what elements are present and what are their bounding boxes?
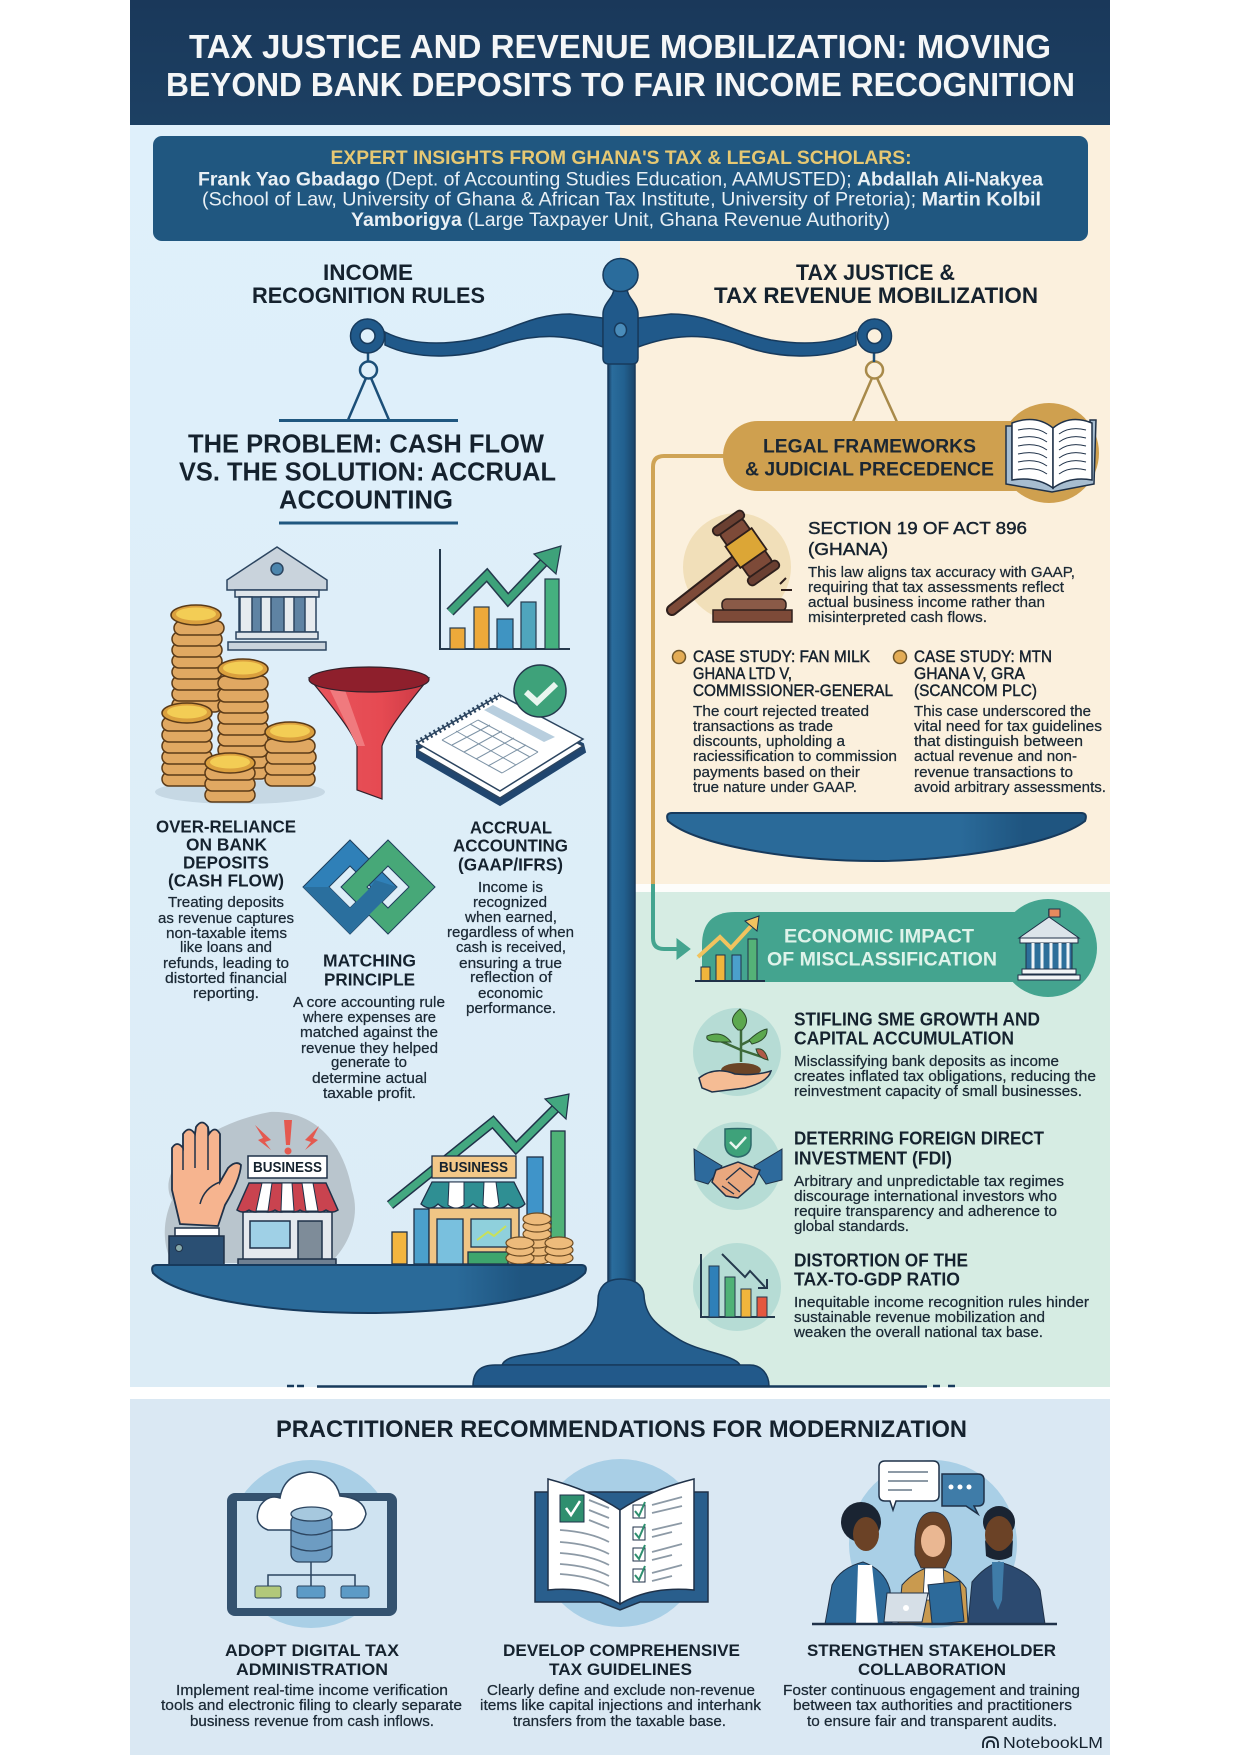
case study: MTN: This case underscored the <box>914 703 1091 720</box>
text: over-reliance on bank deposits: distorted financial <box>165 970 287 987</box>
text: section 19: This law aligns tax accuracy with GAAP, <box>808 564 1075 581</box>
beam rings <box>350 319 892 353</box>
bullet <box>894 650 906 664</box>
case study: MTN <box>894 648 1106 796</box>
case study: Fan Milk: The court rejected treated <box>693 703 869 720</box>
page backgrounds <box>130 125 1110 1755</box>
text: over-reliance on bank deposits: ON BANK <box>186 834 267 854</box>
header banner <box>130 0 1110 125</box>
heading: tax justice: TAX REVENUE MOBILIZATION <box>714 283 1038 308</box>
case study: MTN: avoid arbitrary assessments. <box>914 779 1106 796</box>
heading: income recognition rules: INCOME <box>323 260 413 285</box>
icon: digital tax tablet <box>227 1460 397 1628</box>
text: develop guidelines: TAX GUIDELINES <box>549 1660 692 1679</box>
expert names <box>198 170 1043 231</box>
economic heading text <box>767 926 997 970</box>
text <box>794 1128 1064 1235</box>
heading: tax justice: TAX JUSTICE & <box>796 260 955 285</box>
text: develop guidelines: Clearly define and exclude non-revenue <box>487 1682 755 1699</box>
text: over-reliance on bank deposits: OVER-RELIANCE <box>156 816 296 836</box>
bullet <box>672 650 686 664</box>
text: Inequitable income recognition rules hinder <box>794 1294 1089 1311</box>
expert names: (School of Law, University of Ghana & African Tax Institute, University of Pretoria); Martin Kolbil <box>202 190 1041 210</box>
heading: income recognition rules: RECOGNITION RULES <box>252 283 485 308</box>
coin stack left <box>162 703 212 786</box>
person middle <box>898 1512 968 1625</box>
icon: growth chart <box>440 546 570 649</box>
text: matching principle: where expenses are <box>302 1009 436 1026</box>
expert names: Frank Yao Gbadago (Dept. of Accounting Studies Education, AAMUSTED); Abdallah Ali-Nakyea <box>198 170 1043 190</box>
text: strengthen collaboration: between tax authorities and practitioners <box>793 1697 1072 1714</box>
panel: practitioner recommendations <box>161 1416 1103 1752</box>
icon: thriving business <box>390 1094 573 1264</box>
text: matching principle: matched against the <box>300 1024 438 1041</box>
text: over-reliance on bank deposits: non-taxable items <box>166 925 287 942</box>
left hanger <box>348 353 389 420</box>
coin stack back <box>171 605 224 712</box>
icon: ledger with check <box>417 665 585 805</box>
text: DISTORTION OF THE <box>794 1250 968 1270</box>
text: section 19: actual business income rather than <box>808 594 1045 611</box>
text: over-reliance on bank deposits: DEPOSITS <box>183 852 269 872</box>
text: section 19: SECTION 19 OF ACT 896 <box>808 518 1027 538</box>
text: accrual accounting: cash is received, <box>456 939 566 956</box>
item: tax-to-GDP distortion <box>693 1243 1089 1341</box>
item: deterring FDI <box>693 1122 1064 1235</box>
item: stifling SME growth <box>693 1008 1096 1100</box>
icon: handshake with shield <box>693 1122 782 1210</box>
text <box>794 1010 1096 1100</box>
text: adopt digital tax: tools and electronic filing to clearly separate <box>161 1697 462 1714</box>
person right <box>968 1506 1045 1624</box>
icon: stakeholder collaboration <box>812 1460 1057 1628</box>
legal heading text: & JUDICIAL PRECEDENCE <box>745 460 994 480</box>
heading: problem vs solution: VS. THE SOLUTION: ACCRUAL <box>179 456 556 486</box>
case study: Fan Milk: payments based on their <box>693 764 860 781</box>
pillar <box>608 350 635 1295</box>
icon: stopped business <box>165 1112 355 1265</box>
case study: Fan Milk: true nature under GAAP. <box>693 779 857 796</box>
icon: thriving business: BUSINESS <box>439 1160 508 1176</box>
icon: declining chart <box>693 1243 781 1331</box>
case study: Fan Milk: COMMISSIONER-GENERAL <box>693 682 893 700</box>
text: section 19 <box>808 518 1075 626</box>
text: over-reliance on bank deposits: like loans and <box>180 939 272 956</box>
text: matching principle: PRINCIPLE <box>324 970 415 990</box>
icon: bank building <box>227 547 327 650</box>
text: over-reliance on bank deposits: as revenue captures <box>158 910 294 927</box>
text: reinvestment capacity of small businesses. <box>794 1083 1082 1100</box>
case study: Fan Milk: discounts, upholding a <box>693 733 846 750</box>
small coin stacks <box>506 1213 573 1264</box>
text: over-reliance on bank deposits: (CASH FLOW) <box>168 870 284 890</box>
case study: MTN: actual revenue and non- <box>914 748 1077 765</box>
title: BEYOND BANK DEPOSITS TO FAIR INCOME RECOGNITION <box>166 66 1075 103</box>
text: matching principle: MATCHING <box>323 950 416 970</box>
icon: coin stacks <box>155 605 325 804</box>
banner: economic impact <box>695 899 1097 997</box>
icon: gavel <box>672 509 792 622</box>
text: accrual accounting: regardless of when <box>447 924 574 941</box>
text: TAX-TO-GDP RATIO <box>794 1270 960 1290</box>
text: over-reliance on bank deposits <box>156 816 296 1002</box>
expert heading: EXPERT INSIGHTS FROM GHANA'S TAX & LEGAL SCHOLARS: <box>330 147 912 169</box>
icon: government building <box>1018 909 1080 980</box>
text: accrual accounting: ensuring a true <box>459 955 562 972</box>
text: INVESTMENT (FDI) <box>794 1148 952 1168</box>
text: creates inflated tax obligations, reducing the <box>794 1068 1096 1085</box>
legal heading text: LEGAL FRAMEWORKS <box>763 436 976 458</box>
text: strengthen collaboration: STRENGTHEN STAKEHOLDER <box>807 1641 1056 1660</box>
ground line <box>812 1623 1057 1625</box>
case study: Fan Milk: transactions as trade <box>693 718 833 735</box>
text: STIFLING SME GROWTH AND <box>794 1010 1040 1030</box>
recommendations heading: PRACTITIONER RECOMMENDATIONS FOR MODERNIZATION <box>276 1416 967 1443</box>
panel: expert insights <box>153 136 1088 241</box>
connector: legal to economic <box>653 456 724 959</box>
text: strengthen collaboration: Foster continuous engagement and training <box>783 1682 1080 1699</box>
text: matching principle: determine actual <box>312 1070 427 1087</box>
text: matching principle: generate to <box>331 1054 407 1071</box>
hand <box>172 1122 241 1226</box>
coin stack right <box>265 722 316 786</box>
central hub and finial <box>603 258 638 364</box>
heading: problem vs solution: THE PROBLEM: CASH FLOW <box>188 428 544 458</box>
text: discourage international investors who <box>794 1188 1057 1205</box>
text: CAPITAL ACCUMULATION <box>794 1028 1014 1048</box>
text: strengthen collaboration: to ensure fair and transparent audits. <box>807 1713 1057 1730</box>
title <box>166 28 1075 103</box>
text: DETERRING FOREIGN DIRECT <box>794 1128 1044 1148</box>
text: develop guidelines: items like capital injections and interhank <box>480 1697 762 1714</box>
text: accrual accounting: economic <box>478 985 543 1002</box>
beam left <box>385 314 603 356</box>
text: over-reliance on bank deposits: Treating deposits <box>168 894 284 911</box>
case study: Fan Milk: CASE STUDY: FAN MILK <box>693 648 870 666</box>
coin stack middle <box>218 659 268 779</box>
text: Arbitrary and unpredictable tax regimes <box>794 1173 1064 1190</box>
text: over-reliance on bank deposits: refunds, leading to <box>163 955 289 972</box>
icon: stopped business: BUSINESS <box>253 1160 322 1176</box>
text: accrual accounting: (GAAP/IFRS) <box>458 854 563 874</box>
text: matching principle: A core accounting rule <box>293 994 445 1011</box>
heading: income recognition rules <box>252 260 485 308</box>
icon: red funnel <box>309 667 429 799</box>
expert names: Yamborigya (Large Taxpayer Unit, Ghana Revenue Authority) <box>351 210 890 231</box>
text: accrual accounting: ACCRUAL <box>470 818 552 838</box>
heading: tax justice <box>714 260 1038 308</box>
text: accrual accounting: when earned, <box>464 909 557 926</box>
text: accrual accounting: ACCOUNTING <box>453 836 568 856</box>
speech bubbles <box>879 1461 984 1514</box>
economic heading text: ECONOMIC IMPACT <box>784 926 974 948</box>
right hanger <box>853 353 897 422</box>
legal heading text <box>745 436 994 480</box>
text: strengthen collaboration <box>783 1641 1080 1730</box>
text: global standards. <box>794 1218 909 1235</box>
text: weaken the overall national tax base. <box>793 1324 1043 1341</box>
icon: plant in hand <box>693 1008 781 1096</box>
text: adopt digital tax: ADMINISTRATION <box>236 1660 388 1679</box>
text: develop guidelines: DEVELOP COMPREHENSIVE <box>503 1641 740 1660</box>
text: develop guidelines: transfers from the taxable base. <box>513 1713 726 1730</box>
balance scale <box>287 258 955 1386</box>
text: accrual accounting: recognized <box>473 894 547 911</box>
text: accrual accounting: reflection of <box>470 969 553 986</box>
text: matching principle: taxable profit. <box>323 1085 416 1102</box>
pillar base <box>287 1279 955 1386</box>
text: adopt digital tax: Implement real-time income verification <box>176 1682 448 1699</box>
case study: MTN: vital need for tax guidelines <box>914 718 1102 735</box>
icon: open book <box>1006 419 1096 492</box>
text <box>793 1250 1089 1341</box>
sleeve <box>175 1228 219 1236</box>
text: section 19: (GHANA) <box>808 539 888 559</box>
text: over-reliance on bank deposits: reporting. <box>193 985 259 1002</box>
economic heading text: OF MISCLASSIFICATION <box>767 948 997 970</box>
red awning shop <box>237 1156 338 1265</box>
text: adopt digital tax: ADOPT DIGITAL TAX <box>225 1641 400 1660</box>
case study: MTN: (SCANCOM PLC) <box>914 682 1037 700</box>
case study: Fan Milk <box>672 648 897 796</box>
left scale pan <box>152 1265 586 1313</box>
beam right <box>638 314 856 356</box>
case study: MTN: that distinguish between <box>914 733 1083 750</box>
case study: Fan Milk: GHANA LTD V, <box>693 665 792 683</box>
text: accrual accounting: Income is <box>478 879 543 896</box>
icon: tax guidelines book <box>535 1459 708 1627</box>
coin stack front <box>205 753 255 802</box>
laptop <box>884 1593 928 1622</box>
text: matching principle <box>293 950 445 1102</box>
text: section 19: misinterpreted cash flows. <box>808 609 987 626</box>
right scale pan <box>667 813 1086 861</box>
text: matching principle: revenue they helped <box>301 1040 438 1057</box>
icon: interlocked diamonds <box>303 840 435 934</box>
text: develop guidelines <box>480 1641 762 1730</box>
case study: MTN: CASE STUDY: MTN <box>914 648 1052 666</box>
heading: problem vs solution: ACCOUNTING <box>279 484 453 514</box>
text: sustainable revenue mobilization and <box>794 1309 1045 1326</box>
icon: growth chart small <box>695 916 765 981</box>
text: section 19: requiring that tax assessments reflect <box>808 579 1065 596</box>
text: adopt digital tax <box>161 1641 462 1730</box>
text: accrual accounting: performance. <box>466 1000 556 1017</box>
case study: Fan Milk: raciessification to commission <box>693 748 897 765</box>
banner: legal frameworks <box>723 403 1099 503</box>
warning marks <box>255 1120 319 1154</box>
text: accrual accounting <box>447 818 574 1017</box>
text: adopt digital tax: business revenue from cash inflows. <box>190 1713 434 1730</box>
text: strengthen collaboration: COLLABORATION <box>858 1660 1006 1679</box>
case study: MTN: revenue transactions to <box>914 764 1073 781</box>
text: Misclassifying bank deposits as income <box>794 1053 1059 1070</box>
case study: MTN: GHANA V, GRA <box>914 665 1025 683</box>
text: require transparency and adherence to <box>794 1203 1057 1220</box>
person left <box>825 1502 892 1624</box>
title: TAX JUSTICE AND REVENUE MOBILIZATION: MOVING <box>189 28 1051 65</box>
watermark: NotebookLM: NotebookLM <box>1003 1735 1103 1752</box>
heading: problem vs solution <box>179 420 556 523</box>
